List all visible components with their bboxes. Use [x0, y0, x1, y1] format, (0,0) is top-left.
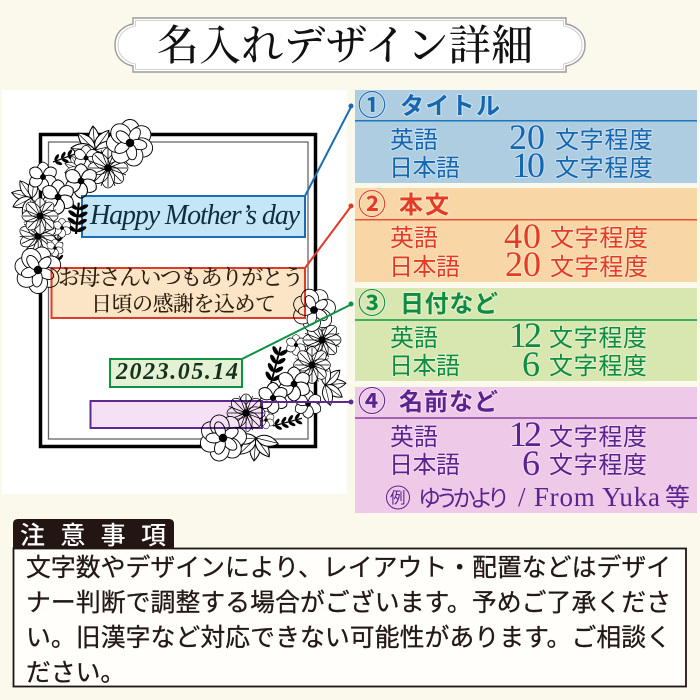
title box: [82, 196, 305, 237]
heading: name: [358, 386, 498, 417]
heading: title: タイトル: [400, 93, 500, 120]
example line: / From Yuka: [518, 482, 660, 512]
example line: 等: [665, 484, 690, 512]
limit: Japanese: [389, 344, 647, 384]
limit: English: 文字程度: [555, 127, 653, 154]
title text: 名入れデザイン詳細: [157, 13, 533, 73]
limit: English: 20: [509, 117, 545, 157]
title sample text: Happy Mother’s day: [89, 200, 301, 231]
limit: Japanese: [389, 145, 653, 185]
heading: date: [358, 288, 498, 319]
limit: Japanese: 6: [522, 344, 540, 384]
notes text: [26, 554, 671, 687]
example line: [386, 482, 690, 512]
limit: English: 英語: [390, 424, 438, 451]
notes text: ナー判断で調整する場合がございます。予めご了承くださ: [26, 588, 671, 617]
limit: Japanese: [389, 443, 647, 483]
limit: English: [390, 414, 647, 454]
body box: [52, 261, 305, 318]
limit: Japanese: 日本語: [389, 254, 460, 281]
date box: [110, 359, 242, 387]
limit: Japanese: 日本語: [389, 155, 460, 182]
panel: notes: [13, 519, 686, 687]
example line: 例: [390, 489, 406, 507]
panel: 1 title: [355, 90, 697, 185]
date sample text: 2023.05.14: [115, 359, 238, 385]
limit: English: 文字程度: [549, 325, 647, 352]
leader line: body: [305, 204, 354, 268]
notes text: い。旧漢字など対応できない可能性があります。ご相談く: [26, 624, 671, 652]
limit: English: 12: [509, 414, 542, 454]
limit: English: 英語: [390, 225, 438, 252]
heading: title: [358, 90, 500, 121]
limit: Japanese: 6: [522, 443, 540, 483]
limit: English: 40: [504, 216, 541, 256]
limit: English: 英語: [390, 127, 438, 154]
heading: body: 本文: [399, 192, 449, 219]
panel: 4 name: [355, 386, 697, 513]
body box: 日頃の感謝を込めて: [91, 288, 276, 318]
limit: Japanese: 文字程度: [555, 155, 653, 182]
panel: 2 body: [355, 188, 697, 284]
limit: English: [390, 315, 647, 355]
leader line: title: [305, 104, 354, 196]
floral wreath bottom right: [190, 281, 348, 472]
panel: card design preview: [2, 90, 348, 494]
limit: Japanese: 文字程度: [549, 353, 647, 380]
limit: English: [390, 216, 648, 256]
panel: 3 date: [355, 288, 697, 384]
body sample text: お母さんいつもありがとう: [58, 261, 304, 292]
limit: Japanese: [389, 244, 648, 284]
limit: Japanese: 文字程度: [549, 452, 647, 479]
limit: English: 文字程度: [549, 424, 647, 451]
limit: English: [390, 117, 653, 157]
heading: date: ③: [358, 288, 386, 319]
limit: Japanese: 20: [505, 244, 541, 284]
title plate: [115, 13, 585, 73]
heading: body: ②: [358, 189, 386, 220]
limit: Japanese: 日本語: [389, 353, 460, 380]
example line: ゆうか より: [418, 486, 510, 511]
heading: name: 名前など: [399, 389, 498, 416]
notes text: 文字数やデザインにより、レイアウト・配置などはデザイ: [26, 554, 671, 582]
card frame: [40, 134, 316, 446]
heading: date: 日付など: [400, 291, 498, 318]
leader line: name: [262, 400, 354, 404]
heading: name: ④: [358, 386, 386, 417]
notes text: ださい。: [26, 660, 125, 687]
floral wreath top left: [6, 120, 155, 301]
heading: body: [358, 189, 449, 220]
notes tab: 注意事項: [20, 522, 166, 550]
limit: English: 英語: [390, 325, 438, 352]
limit: Japanese: 日本語: [389, 452, 460, 479]
limit: Japanese: 10: [512, 145, 545, 185]
name box: [90, 401, 262, 428]
leader line: date: [242, 302, 354, 359]
limit: Japanese: 文字程度: [550, 254, 648, 281]
limit: English: 文字程度: [550, 225, 648, 252]
limit: English: 12: [509, 315, 542, 355]
heading: title: ①: [358, 90, 386, 121]
